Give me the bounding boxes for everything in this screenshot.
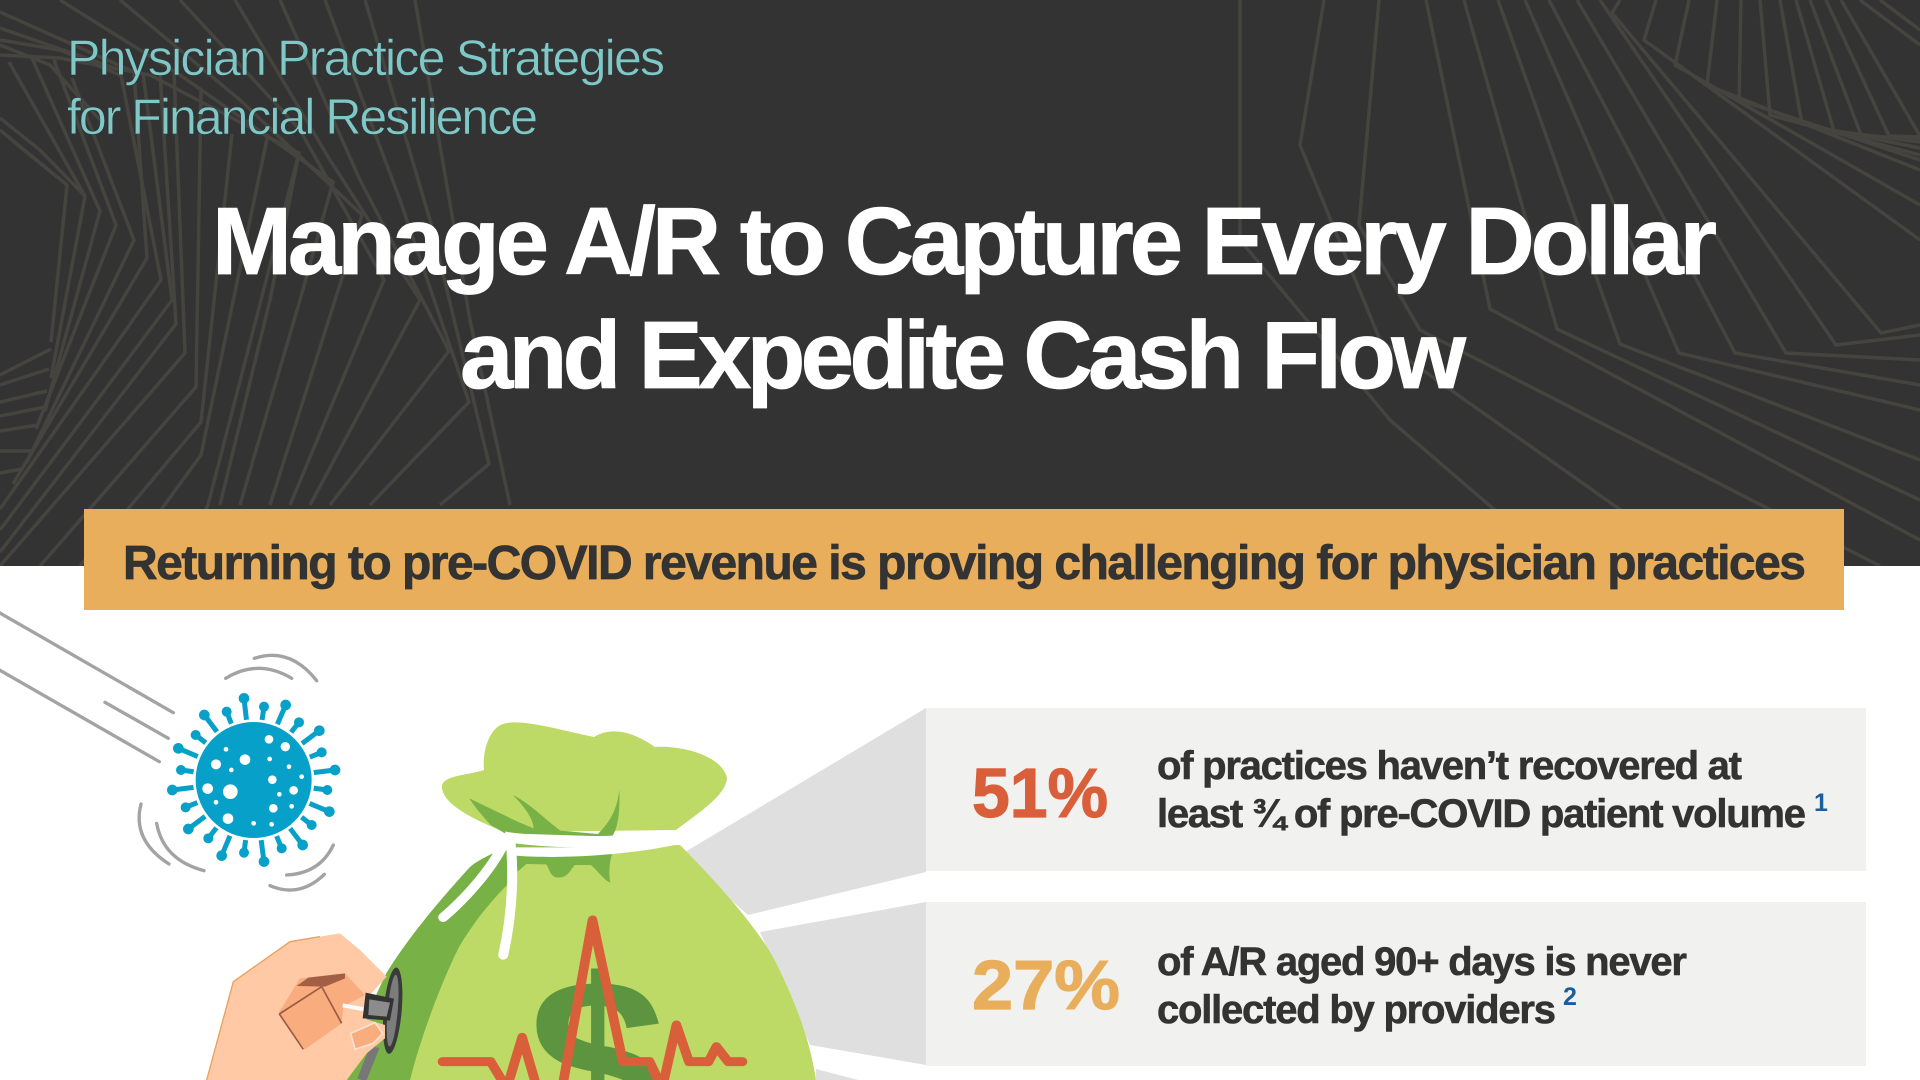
bag top ruffle (442, 722, 727, 832)
panel: 51% statistic (926, 708, 1866, 871)
stat number 51%: 51% (972, 754, 1108, 832)
wedge: lower connector (816, 1069, 858, 1080)
subtitle (67, 30, 665, 145)
wedge: connector to panel 1 (680, 708, 926, 915)
stat description 1 (1157, 744, 1806, 836)
banner: Returning to pre-COVID revenue is proving challenging for physician practices (123, 537, 1806, 590)
background pattern: right line fan (1240, 0, 1920, 566)
palm lines (279, 987, 342, 1049)
title: Manage A/R to Capture Every Dollar (212, 188, 1717, 295)
virus spike bulbs (167, 693, 340, 867)
header background (0, 0, 1920, 566)
stethoscope chest piece (380, 967, 405, 1055)
title: and Expedite Cash Flow (460, 302, 1466, 409)
stat number 27%: 27% (972, 946, 1120, 1024)
subtitle: for Financial Resilience (67, 89, 538, 145)
rope band (505, 830, 679, 857)
thumbnail (351, 1023, 383, 1049)
stat description 2: collected by providers (1157, 988, 1556, 1032)
stat description 1: of practices haven’t recovered at (1157, 744, 1742, 788)
stethoscope tube (362, 1047, 375, 1080)
bag creases (469, 789, 619, 837)
stat description 1: least ¾ of pre-COVID patient volume (1157, 792, 1806, 836)
wedge: connector to panel 2 (760, 902, 926, 1065)
icon: virus with motion lines (0, 613, 340, 890)
palm shading (278, 973, 365, 1049)
bag body dark side (347, 850, 560, 1080)
hand outline (207, 937, 320, 1080)
background pattern: left line fan (0, 0, 510, 566)
illustration: money bag (347, 722, 816, 1080)
bag neck shadow (516, 853, 612, 883)
hand (207, 933, 387, 1080)
footnote 1: 1 (1814, 789, 1828, 817)
palm creases (297, 973, 345, 987)
stethoscope knob (363, 993, 394, 1021)
title (212, 188, 1717, 409)
motion lines (0, 613, 333, 890)
stat description 2: of A/R aged 90+ days is never (1157, 940, 1687, 984)
stat description 2 (1157, 940, 1687, 1032)
virus body (193, 719, 314, 841)
rope sliver (516, 843, 584, 847)
bag body light front (410, 845, 816, 1080)
panel: 27% statistic (926, 902, 1866, 1066)
virus spikes (172, 698, 335, 862)
subtitle: Physician Practice Strategies (67, 30, 665, 86)
heartbeat line (442, 920, 742, 1080)
stethoscope stem (343, 1005, 364, 1009)
banner (84, 509, 1844, 610)
rope tails (443, 845, 512, 955)
illustration: hand with stethoscope (207, 933, 405, 1080)
footnote 2: 2 (1563, 983, 1577, 1011)
